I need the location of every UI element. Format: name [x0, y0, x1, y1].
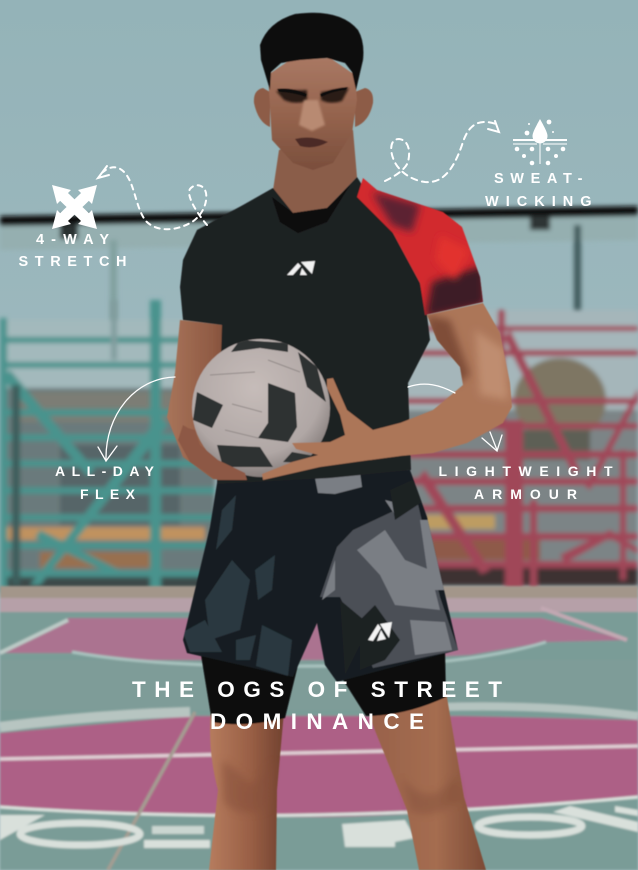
nose [299, 100, 325, 131]
face [268, 58, 357, 170]
arrow: dashed loop [385, 121, 499, 182]
hair [260, 13, 363, 90]
text: 4-way stretch: 4-WAY [36, 232, 114, 248]
model figure [167, 13, 512, 870]
callout: all-day flex [55, 377, 175, 502]
left arm [167, 320, 245, 482]
ears [254, 88, 373, 127]
text: all-day flex [55, 463, 159, 502]
text: all-day flex: FLEX [80, 486, 140, 502]
jersey red sleeve [356, 178, 484, 316]
green bleachers [0, 300, 215, 605]
callout: sweat-wicking [385, 119, 597, 210]
mouth [295, 138, 328, 147]
jersey [180, 170, 490, 484]
head [254, 13, 373, 170]
icon: shorts logo [368, 622, 392, 641]
callout: 4-way stretch [18, 166, 207, 270]
title: THE OGS OF STREET [132, 677, 510, 702]
text: all-day flex: ALL-DAY [55, 463, 159, 479]
text: sweat-wicking: SWEAT- [494, 171, 588, 187]
neck [272, 130, 357, 213]
text: lightweight armour: ARMOUR [474, 486, 582, 502]
soccer ball [192, 339, 330, 477]
steel roof beam [0, 206, 638, 330]
text: 4-way stretch [18, 232, 132, 270]
arrow: curved [98, 377, 175, 461]
right arm [370, 303, 512, 460]
camo shorts [183, 470, 458, 682]
icon: water drop on fabric [513, 119, 567, 165]
arrow: dashed loop [98, 166, 207, 229]
text: 4-way stretch: STRETCH [18, 254, 132, 270]
legs [209, 680, 486, 870]
callout: lightweight armour [408, 384, 618, 502]
text: lightweight armour [438, 463, 618, 502]
brows and eyes [276, 88, 349, 103]
title [132, 677, 510, 734]
icon: chest logo [287, 261, 315, 275]
hands [178, 378, 400, 480]
court [0, 586, 638, 870]
icon: four-way arrows [52, 185, 97, 229]
text: sweat-wicking: WICKING [485, 194, 597, 210]
text: sweat-wicking [485, 171, 597, 210]
title: DOMINANCE [210, 709, 432, 734]
red bleachers [405, 310, 638, 595]
compression under-shorts [201, 650, 446, 724]
arrow: curved behind forearm [408, 384, 502, 451]
text: lightweight armour: LIGHTWEIGHT [438, 463, 618, 479]
jersey collar [272, 185, 350, 233]
